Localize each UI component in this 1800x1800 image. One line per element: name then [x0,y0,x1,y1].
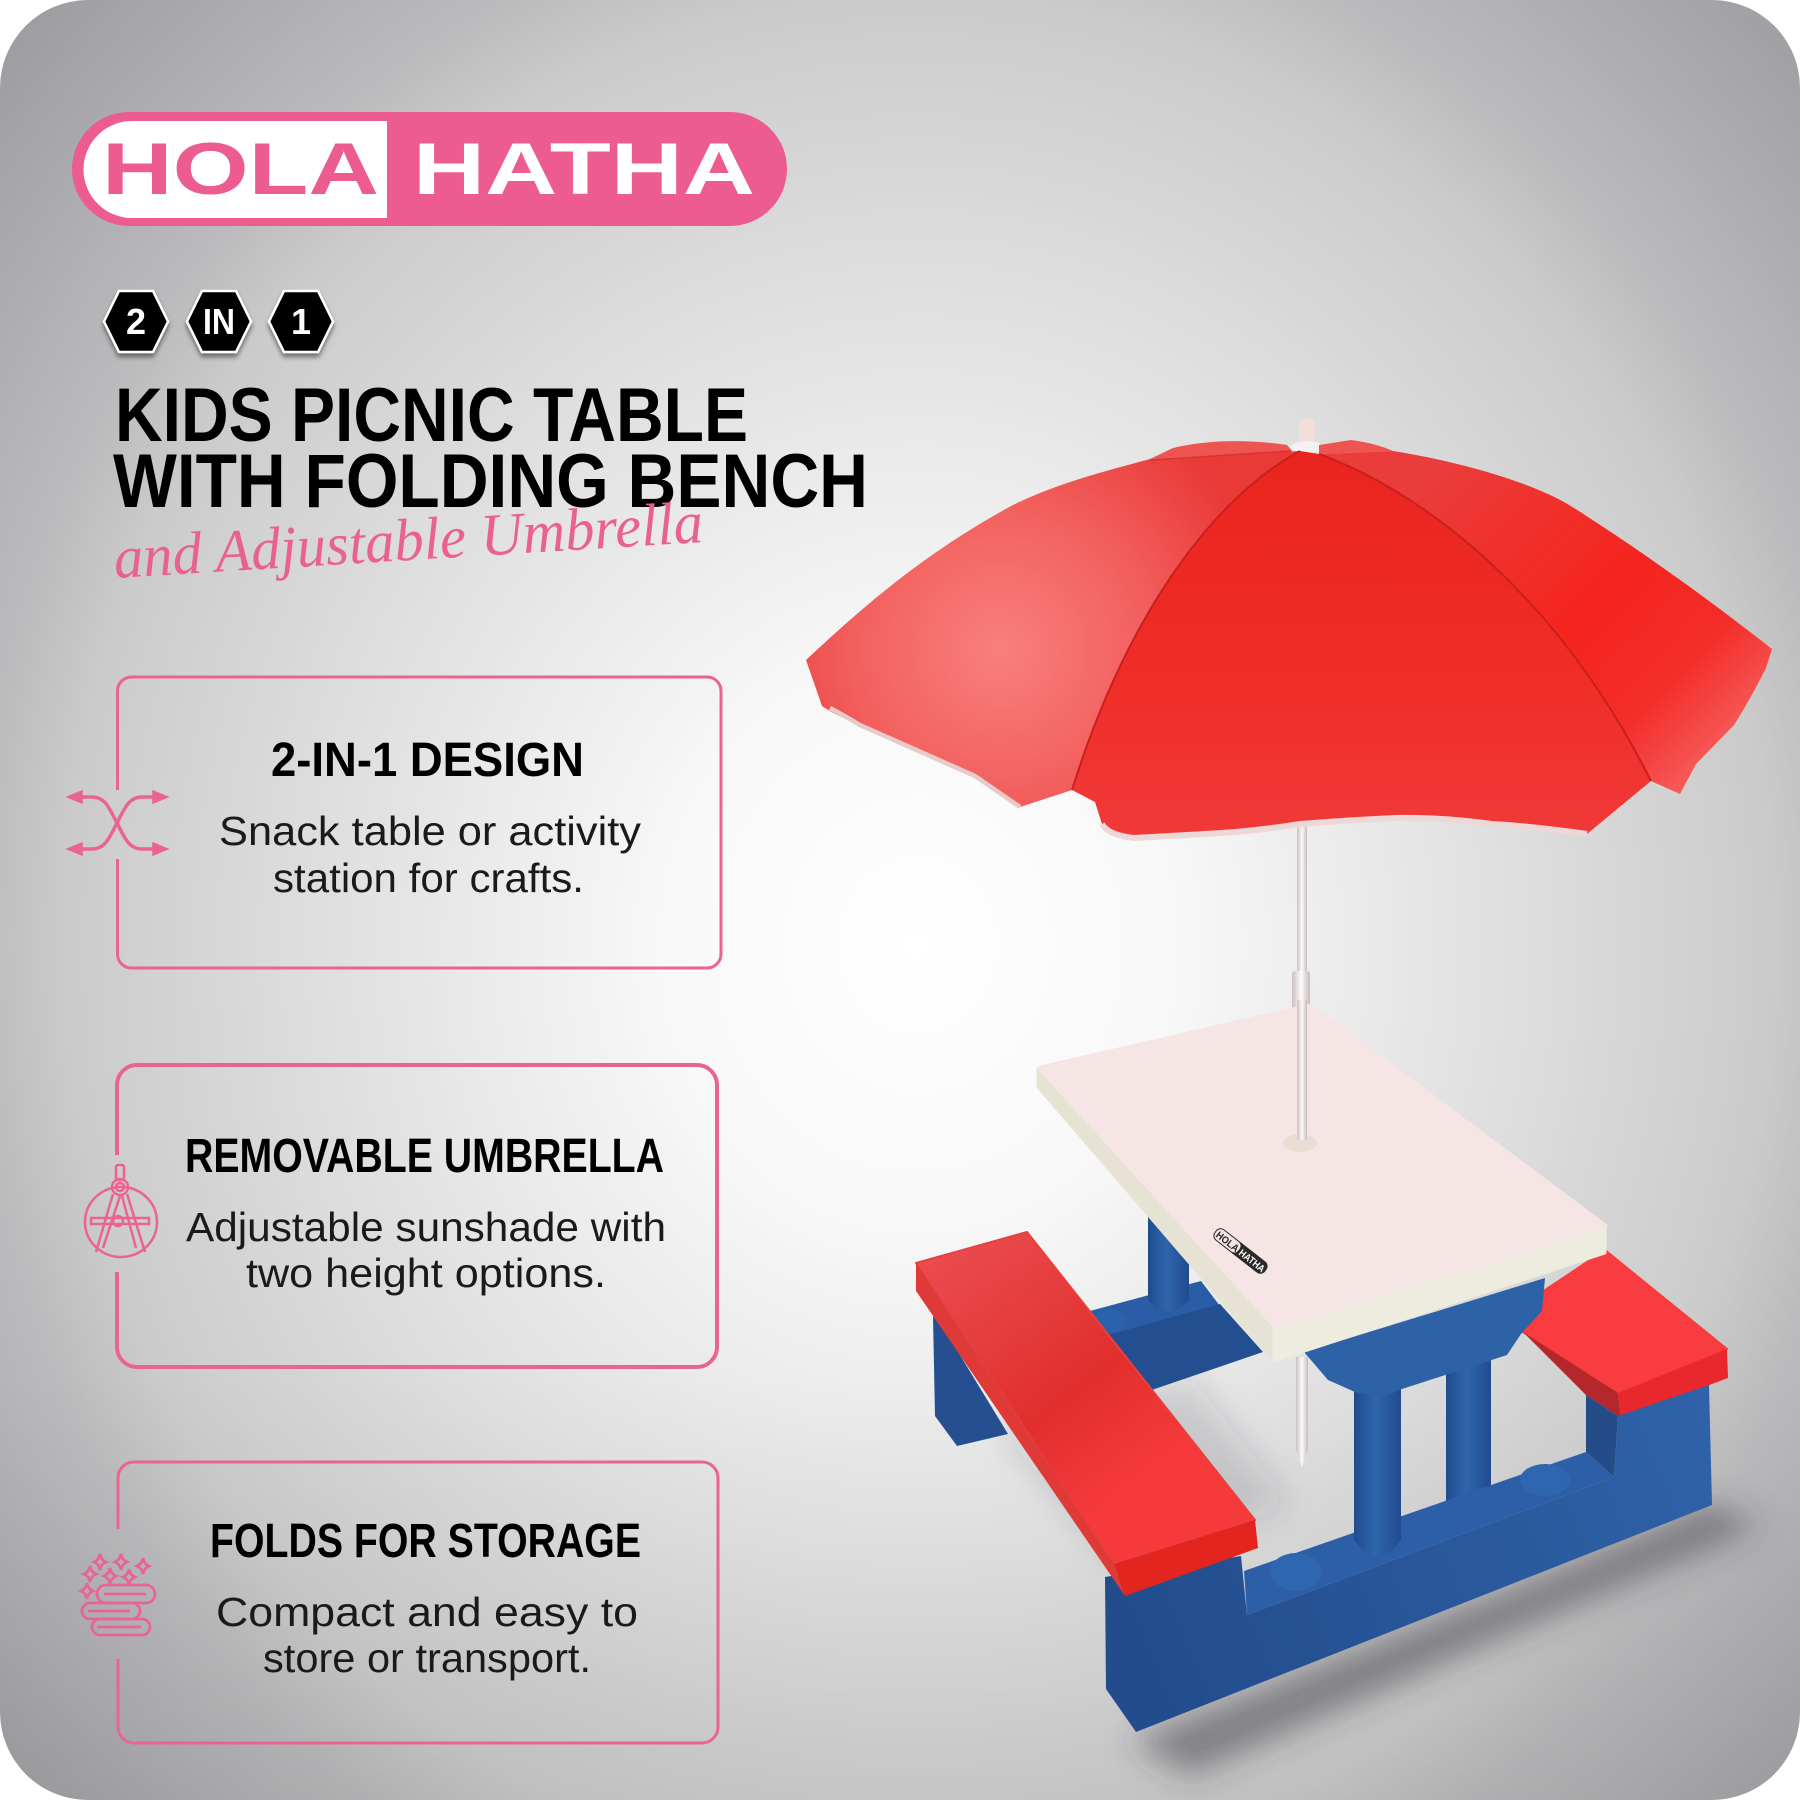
rear column [1148,1200,1189,1311]
front beam [1105,1385,1712,1732]
beam top face [1244,1452,1614,1615]
body text: store or transport. [263,1635,591,1681]
product: picnic table [916,1000,1728,1732]
badge: 2 in 1 hexagons: 2 [126,301,146,342]
ground shadow [1000,1375,1760,1775]
logo: Hola Hatha: HATHA [413,129,755,210]
seat discs [1270,1553,1322,1591]
pole [1297,825,1307,1143]
table top [1038,1006,1605,1361]
finial [1299,418,1315,448]
badge: 2 in 1 hexagons: 1 [291,301,311,342]
pole joint [1292,971,1310,1019]
panel: 2-in-1 design [70,677,721,968]
front column [1354,1375,1401,1556]
rear bench leg [933,1316,1008,1446]
pole above table [1297,1000,1307,1140]
umbrella hub [1283,1134,1317,1152]
body text: two height options. [246,1250,606,1296]
hem trim [1102,818,1587,838]
left bench [916,1232,1258,1596]
logo: Hola Hatha [72,112,787,226]
product: umbrella [806,418,1772,1143]
body text [216,1589,638,1681]
left canopy panel [806,451,1300,807]
table logo tag: HOLA [1213,1230,1241,1255]
panel: folds for storage [81,1462,718,1743]
centre canopy panel [1072,451,1651,838]
logo: Hola Hatha: HOLA [102,129,379,210]
heading: FOLDS FOR STORAGE [210,1515,641,1568]
title: KIDS PICNIC TABLE [115,373,748,458]
icon: compass [85,1165,157,1257]
centre support [1304,1278,1545,1398]
spike [1296,1357,1308,1467]
cap folds [1150,440,1393,459]
badge: 2 in 1 hexagons [104,291,333,352]
right canopy panel [1319,451,1772,794]
notch wall [1586,1395,1618,1477]
icon: crossing arrows [70,792,165,854]
body text: Compact and easy to [216,1589,638,1635]
icon: folded stack and sparkles [81,1554,155,1635]
title [113,373,868,524]
heading: 2-IN-1 DESIGN [271,734,584,787]
panel: removable umbrella [85,1065,717,1367]
table logo tag [1211,1226,1270,1276]
rear cross beam [1090,1281,1263,1394]
right bench [1523,1250,1728,1418]
badge: 2 in 1 hexagons: IN [203,301,235,342]
table logo tag: HATHA [1236,1248,1267,1275]
heading: REMOVABLE UMBRELLA [185,1130,664,1183]
inner column [1446,1340,1491,1524]
ribs [1072,451,1651,790]
body text [219,808,642,901]
body text: station for crafts. [273,855,584,901]
subtitle: script line: and Adjustable Umbrella [112,489,705,591]
body text: Adjustable sunshade with [186,1204,666,1250]
body text: Snack table or activity [219,808,642,854]
body text [186,1204,666,1296]
title: WITH FOLDING BENCH [113,439,868,524]
